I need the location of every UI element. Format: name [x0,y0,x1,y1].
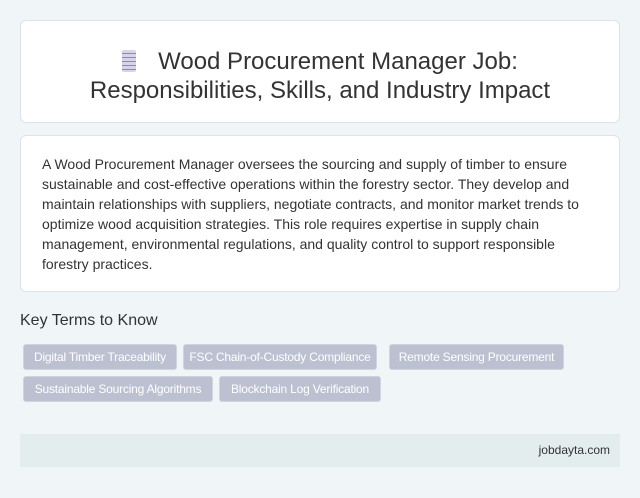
icon: document scroll [122,50,136,72]
tag [23,344,177,370]
tag: Digital Timber Traceability [34,350,166,364]
title: Responsibilities, Skills, and Industry Impact [90,77,550,104]
title [90,48,550,104]
tag [219,376,381,402]
title: Wood Procurement Manager Job: [158,48,518,75]
tag [23,376,213,402]
tag: FSC Chain-of-Custody Compliance [189,350,371,364]
tag: Blockchain Log Verification [231,382,369,396]
tag [183,344,377,370]
footer [20,434,620,467]
text block: description: A Wood Procurement Manager oversees the sourcing and supply of timber to ensure sustainable and cost-effective operations within the forestry sector. They develop and maintain relationships with suppliers, negotiate contracts, and monitor market trends to optimize wood acquisition strategies. This role requires expertise in supply chain management, environmental regulations, and quality control to support responsible forestry practices. [42,156,579,272]
tag [389,344,564,370]
tag: Remote Sensing Procurement [399,350,554,364]
panel: title [20,20,620,123]
panel: description [20,135,620,292]
tag: Sustainable Sourcing Algorithms [35,382,201,396]
heading: key terms: Key Terms to Know [20,312,158,329]
footer text: jobdayta.com [539,443,610,457]
